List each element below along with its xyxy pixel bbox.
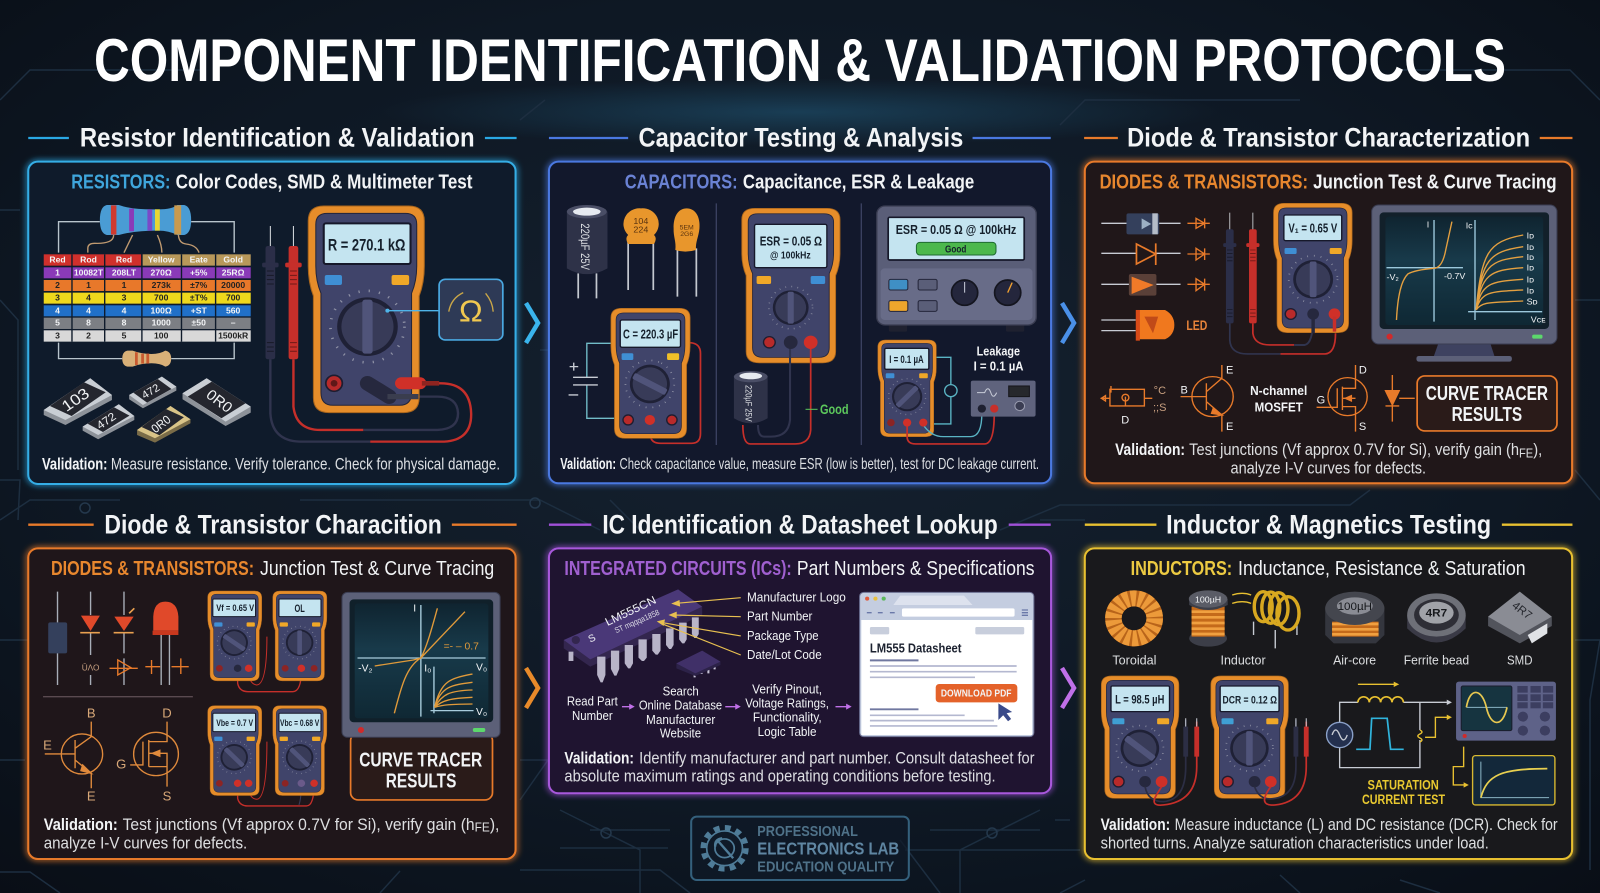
subtitle: CAPACITORS:	[625, 172, 738, 193]
process flow: Voltage Ratings,	[745, 696, 829, 710]
chart: diode and transistor curves: Iᴅ	[1527, 230, 1534, 240]
icon: SMD resistors: 0R0	[149, 413, 174, 436]
browser datasheet window: LM555 Datasheet	[870, 641, 962, 655]
chart: diode and transistor curves: Iᴅ	[1527, 242, 1534, 252]
ESR meter instrument: Good	[945, 244, 966, 255]
chart: diode and transistor curves: -V₂	[1386, 272, 1399, 282]
process flow: Manufacturer	[646, 712, 716, 727]
validation text: analyze I-V curves for defects.	[1230, 459, 1426, 477]
transistor labels: D	[162, 706, 172, 720]
transistor labels: G	[116, 757, 126, 772]
download button: DOWNLOAD PDF	[941, 689, 1011, 700]
transistor labels: N-channel	[1250, 383, 1307, 398]
multimeter: DC resistance	[1211, 676, 1309, 805]
colour code table: 5	[55, 318, 60, 328]
icon: SMD resistors	[44, 377, 251, 443]
oscilloscope	[1456, 682, 1556, 741]
leakage label: I = 0.1 µA	[974, 359, 1024, 374]
saturation test circuit	[1327, 682, 1469, 788]
icon: ohm callout: Ω	[459, 294, 483, 329]
panel: diodes and transistors bottom	[28, 548, 516, 859]
panel: resistors	[28, 162, 516, 484]
icon: ohm callout	[385, 279, 503, 340]
multimeter: Vf	[208, 591, 262, 681]
process flow: Read Part	[567, 694, 618, 709]
chart: I-V curves	[357, 604, 487, 718]
icons: diode packages	[1101, 213, 1207, 341]
chart: diode and transistor curves	[1386, 219, 1546, 325]
transistor labels: G	[1317, 394, 1325, 406]
colour code table: 4	[122, 305, 127, 315]
icon: capacitor under ESR test	[734, 336, 849, 444]
colour code table: Gold	[223, 255, 243, 265]
colour code table: 20000	[221, 280, 245, 290]
process flow: Functionality,	[753, 710, 822, 725]
icon: SMD resistors: 472	[95, 411, 119, 432]
transistor labels: S	[163, 789, 171, 804]
component labels: Ferrite bead	[1404, 653, 1469, 667]
component labels: Inductor	[1220, 653, 1266, 667]
subtitle	[625, 172, 974, 193]
validation text: analyze I-V curves for defects.	[44, 834, 247, 852]
multimeter: OL: OL	[294, 603, 305, 615]
colour code table: 1000	[152, 318, 171, 328]
icon: SMD inductor: 4R7	[1509, 600, 1534, 622]
curve tracer monitor	[342, 592, 500, 737]
colour code table: 700	[226, 293, 241, 303]
colour code table: ±50	[192, 318, 206, 328]
icon: DC source	[971, 381, 1036, 417]
subtitle	[1131, 558, 1526, 580]
multimeter: capacitance: C = 220.3 µF	[623, 327, 678, 341]
validation text: Validation:	[1115, 440, 1185, 459]
icon: electrolytic capacitor: 220µF 25V	[578, 223, 590, 270]
validation text: Validation:	[564, 749, 634, 767]
icon: DIP IC chip: LM555CN	[603, 595, 658, 629]
subtitle: Inductance, Resistance & Saturation	[1238, 558, 1526, 580]
process flow: Search	[663, 684, 699, 699]
transistor labels: °C	[1154, 385, 1166, 397]
icon: probes and leads	[1223, 213, 1336, 354]
chip part labels: Part Number	[747, 609, 813, 624]
colour code table: 3	[55, 331, 60, 341]
colour code table: –	[231, 318, 236, 328]
chart: saturation curve	[1473, 756, 1555, 805]
callout: curve tracer results: CURVE TRACER	[1426, 383, 1548, 405]
colour code table: Rod	[80, 255, 97, 265]
subtitle: INTEGRATED CIRCUITS (ICs):	[564, 558, 792, 580]
validation text: Validation:	[42, 455, 107, 473]
colour code table: 2	[55, 280, 60, 290]
icon: ceramic capacitors: 224	[633, 225, 648, 235]
colour code table: Red	[116, 255, 132, 265]
multimeter: Vbc: Vbc = 0.68 V	[280, 718, 320, 728]
icon: DIP IC chip	[564, 589, 702, 682]
transistor labels: E	[87, 789, 96, 804]
multimeter: inductance	[1101, 676, 1199, 805]
colour code table: 700	[154, 293, 169, 303]
badge text: PROFESSIONAL	[757, 824, 858, 840]
curve tracer monitor	[1372, 205, 1557, 362]
browser datasheet window	[860, 592, 1034, 737]
icons: diode packages: LED	[1186, 318, 1207, 334]
arrow: ICs to inductors	[1062, 668, 1074, 708]
colour code table: 10082T	[74, 267, 104, 277]
icon: ceramic capacitors: 5EM	[680, 224, 694, 231]
colour code table: 4	[86, 293, 91, 303]
multimeter: resistance	[308, 206, 439, 413]
icon: DIP IC chip: S	[587, 633, 598, 645]
download button	[936, 684, 1017, 702]
colour code table: 100Ω	[151, 305, 172, 315]
subtitle: DIODES & TRANSISTORS:	[51, 558, 254, 580]
icon: capacitor under ESR test: Good	[820, 402, 849, 418]
multimeter: inductance: L = 98.5 µH	[1115, 692, 1164, 706]
colour code table: +ST	[191, 305, 208, 315]
badge text	[757, 824, 899, 876]
transistor labels	[1121, 364, 1367, 433]
transistor labels: D	[1359, 364, 1367, 376]
subtitle: Junction Test & Curve Tracing	[260, 558, 494, 580]
component labels: SMD	[1507, 653, 1533, 667]
multimeter: forward voltage: V₁ = 0.65 V	[1288, 221, 1338, 235]
icon: DIP IC chip: ST mqqqa1858	[613, 608, 661, 635]
heading: resistor identification: Resistor Identification & Validation	[80, 122, 475, 153]
icon: small SOIC chip	[676, 651, 720, 677]
icon: capacitor under ESR test: 220µF 25V	[742, 385, 753, 422]
icon: SMD resistors: 472	[140, 382, 162, 402]
validation text	[560, 455, 1039, 473]
validation text	[1115, 440, 1542, 477]
icon: air-core inductor: 100µH	[1338, 601, 1372, 613]
chip part labels	[747, 590, 846, 662]
multimeter: OL	[273, 591, 327, 681]
colour code table: ±T%	[190, 293, 208, 303]
validation text: Validation:	[1101, 815, 1170, 834]
multimeter: capacitance	[611, 308, 700, 443]
colour code table: 1	[55, 267, 60, 277]
validation text: ),	[490, 815, 499, 834]
chart: diode and transistor curves: Iᴅ	[1527, 263, 1534, 273]
multimeter: ESR: ESR = 0.05 Ω	[760, 234, 822, 248]
panel: diodes and transistors top	[1085, 162, 1572, 483]
leakage label	[974, 344, 1024, 374]
validation text: Measure resistance. Verify tolerance. Check for physical damage.	[111, 455, 500, 473]
icon: ferrite bead	[1407, 593, 1466, 642]
chart: I-V curves: I₀	[424, 664, 431, 675]
process flow: Verify Pinout,	[752, 682, 822, 696]
callout: curve tracer results: RESULTS	[1452, 404, 1522, 426]
multimeter: Vbe	[208, 706, 262, 796]
subtitle: DIODES & TRANSISTORS:	[1100, 172, 1308, 193]
icon: SMD inductor	[1488, 592, 1552, 643]
saturation label	[1362, 778, 1445, 808]
colour code table: 8	[86, 318, 91, 328]
multimeter: leakage	[878, 340, 994, 444]
validation text: Validation:	[560, 455, 616, 473]
chip part labels: Package Type	[747, 628, 819, 643]
callout: curve tracer results: RESULTS	[386, 771, 456, 793]
arrow: capacitors to diodes	[1062, 303, 1074, 343]
chip part labels: Manufacturer Logo	[747, 590, 846, 605]
validation text	[564, 749, 1035, 786]
icon: ceramic capacitors: 104	[633, 216, 648, 226]
icon: SMD resistors: 103	[59, 385, 93, 415]
transistor labels: E	[1226, 421, 1233, 433]
leakage label: Leakage	[977, 344, 1020, 358]
heading: inductor testing: Inductor & Magnetics Testing	[1166, 509, 1491, 539]
saturation label: SATURATION	[1368, 778, 1439, 793]
multimeter: leakage: I = 0.1 µA	[889, 354, 924, 366]
multimeter: ESR	[742, 208, 840, 363]
process flow: Website	[660, 726, 701, 741]
chart: diode and transistor curves: Iᴄ	[1466, 220, 1473, 230]
multimeter: Vbe: Vbe = 0.7 V	[216, 718, 254, 729]
multimeter: Vf: Vf = 0.65 V	[216, 603, 255, 614]
process flow: Online Database	[639, 698, 722, 713]
arrow: resistors to capacitors	[526, 303, 538, 343]
icon: ferrite bead: 4R7	[1426, 608, 1447, 620]
validation text: absolute maximum ratings and operating conditions before testing.	[564, 767, 996, 786]
icon: electrolytic capacitor	[567, 205, 607, 298]
subtitle	[71, 172, 473, 193]
colour code table: 4	[86, 305, 91, 315]
colour code table: 3	[55, 293, 60, 303]
icon: toroidal inductor	[1113, 598, 1155, 638]
arrow: diodes to ICs	[526, 668, 538, 708]
transistor labels: E	[43, 738, 52, 752]
heading: diode and transistor characterization: Diode & Transistor Characterization	[1127, 122, 1530, 153]
callout: curve tracer results: CURVE TRACER	[359, 750, 482, 772]
icon: gear and wrench	[703, 828, 746, 869]
process flow: Logic Table	[758, 724, 817, 739]
panel: capacitors	[549, 162, 1051, 483]
icon: bobbin inductor: 100µH	[1195, 594, 1221, 604]
colour code table: 1	[86, 280, 91, 290]
icons: transistor symbols	[1101, 365, 1415, 432]
validation text: Identify manufacturer and part number. Consult datasheet for	[639, 749, 1035, 767]
heading: diode and transistor charaction: Diode & Transistor Characition	[104, 509, 442, 539]
transistor labels: B	[87, 706, 96, 720]
chart: I-V curves: V₀	[476, 707, 487, 718]
icon: ceramic capacitors	[623, 208, 700, 297]
chart: diode and transistor curves: Iᴅ	[1527, 285, 1534, 295]
validation text: ),	[1533, 440, 1542, 459]
transistor labels: ;;S	[1153, 402, 1166, 414]
subtitle: INDUCTORS:	[1131, 558, 1232, 580]
multimeter: ESR: @ 100kHz	[770, 251, 811, 262]
arrows: part labels	[657, 598, 741, 655]
saturation label: CURRENT TEST	[1362, 792, 1445, 808]
colour code table: 3	[122, 293, 127, 303]
validation text	[1101, 815, 1558, 852]
validation text	[44, 815, 499, 852]
colour code table: 560	[226, 305, 241, 315]
colour code table	[44, 254, 251, 342]
subtitle	[51, 558, 494, 580]
transistor labels: MOSFET	[1255, 400, 1303, 415]
badge text: ELECTRONICS LAB	[757, 839, 899, 859]
heading: IC identification: IC Identification & Datasheet Lookup	[602, 509, 998, 539]
validation text: Check capacitance value, measure ESR (low is better), test for DC leakage current.	[620, 455, 1039, 473]
icon: air-core inductor	[1325, 592, 1384, 643]
validation text: shorted turns. Analyze saturation characteristics under load.	[1101, 834, 1489, 852]
chip part labels: Date/Lot Code	[747, 647, 822, 662]
chart: diode and transistor curves: I	[1427, 219, 1429, 229]
subtitle	[1100, 172, 1557, 193]
icons: diode components	[48, 592, 189, 685]
multimeter: forward voltage	[1274, 203, 1352, 333]
validation text: FE	[475, 819, 490, 834]
badge: professional electronics lab	[691, 817, 909, 880]
validation text: FE	[1519, 446, 1534, 461]
colour code table: Eate	[190, 255, 208, 265]
colour code table: 270Ω	[151, 267, 172, 277]
colour code table: 1500kR	[218, 331, 248, 341]
subtitle: Color Codes, SMD & Multimeter Test	[176, 172, 473, 193]
panel: integrated circuits	[549, 548, 1051, 793]
component labels: Air-core	[1333, 653, 1376, 667]
colour code table: Yellow	[148, 255, 175, 265]
colour code table: +5%	[190, 267, 208, 277]
validation text: Test junctions (Vf approx 0.7V for Si), verify gain (h	[123, 815, 510, 834]
colour code table: 25RΩ	[222, 267, 245, 277]
chart: I-V curves: -V₂	[358, 664, 373, 675]
chart: diode and transistor curves: -0.7V	[1444, 271, 1466, 281]
icon: small tan resistor	[59, 343, 234, 367]
chart: diode and transistor curves: Iᴅ	[1527, 275, 1534, 285]
callout: curve tracer results	[351, 733, 492, 800]
process flow	[567, 682, 852, 741]
colour code table: 100	[154, 331, 169, 341]
colour code table: 1	[122, 280, 127, 290]
colour code table: 208LT	[112, 267, 137, 277]
chart: I-V curves: I	[413, 604, 416, 615]
component labels	[1112, 653, 1533, 667]
icon: battery wiring	[569, 343, 614, 418]
chart: I-V curves: V₀	[476, 663, 487, 674]
icon: air coil	[1232, 592, 1299, 648]
ESR meter instrument	[877, 206, 1036, 332]
colour code table: 2	[86, 331, 91, 341]
panel: inductors	[1085, 548, 1572, 859]
transistor labels: B	[1181, 384, 1188, 396]
colour code table: 8	[122, 318, 127, 328]
process flow: Number	[572, 708, 613, 723]
subtitle	[564, 558, 1035, 580]
transistor labels: D	[1121, 414, 1129, 426]
colour code table: Red	[49, 255, 66, 265]
icons: diode components: ŪΛΟ	[82, 663, 99, 673]
icons: BJT and MOSFET symbols	[45, 722, 178, 788]
validation text: Test junctions (Vf approx 0.7V for Si), verify gain (h	[1189, 440, 1577, 459]
subtitle: Part Numbers & Specifications	[797, 558, 1035, 580]
chart: I-V curves: =- – 0.7	[444, 641, 479, 652]
subtitle: RESISTORS:	[71, 172, 170, 193]
icons: diode schematic symbols	[1187, 218, 1210, 291]
colour code table: 5	[122, 331, 127, 341]
multimeter: Vbc	[273, 706, 327, 796]
chart: diode and transistor curves: Vᴄᴇ	[1531, 315, 1546, 325]
icon: SMD resistors: 0R0	[203, 387, 235, 416]
icon: ceramic capacitors: 2G6	[680, 231, 693, 238]
validation text	[42, 455, 500, 473]
transistor labels: S	[1359, 421, 1366, 433]
callout: curve tracer results	[1417, 376, 1557, 431]
icon: colour band resistor	[59, 205, 234, 253]
component labels: Toroidal	[1112, 653, 1156, 667]
multimeter: DC resistance: DCR = 0.12 Ω	[1223, 694, 1277, 706]
subtitle: Capacitance, ESR & Leakage	[743, 172, 974, 193]
colour code table: 273k	[152, 280, 171, 290]
icon: bobbin inductor	[1189, 590, 1228, 647]
chart: diode and transistor curves: Sᴅ	[1527, 296, 1538, 306]
ESR meter instrument: ESR = 0.05 Ω @ 100kHz	[896, 222, 1016, 237]
validation text: Validation:	[44, 815, 118, 834]
chart: diode and transistor curves: Iᴅ	[1527, 252, 1534, 262]
transistor labels: E	[1226, 364, 1233, 376]
badge text: EDUCATION QUALITY	[757, 860, 894, 876]
leads between meters	[238, 637, 314, 806]
multimeter: resistance: R = 270.1 kΩ	[328, 236, 405, 255]
transistor labels	[43, 706, 172, 804]
icon: probes and leads	[262, 226, 471, 442]
colour code table: ±7%	[190, 280, 208, 290]
heading: capacitor testing: Capacitor Testing & Analysis	[638, 122, 963, 153]
colour code table: 4	[55, 305, 60, 315]
